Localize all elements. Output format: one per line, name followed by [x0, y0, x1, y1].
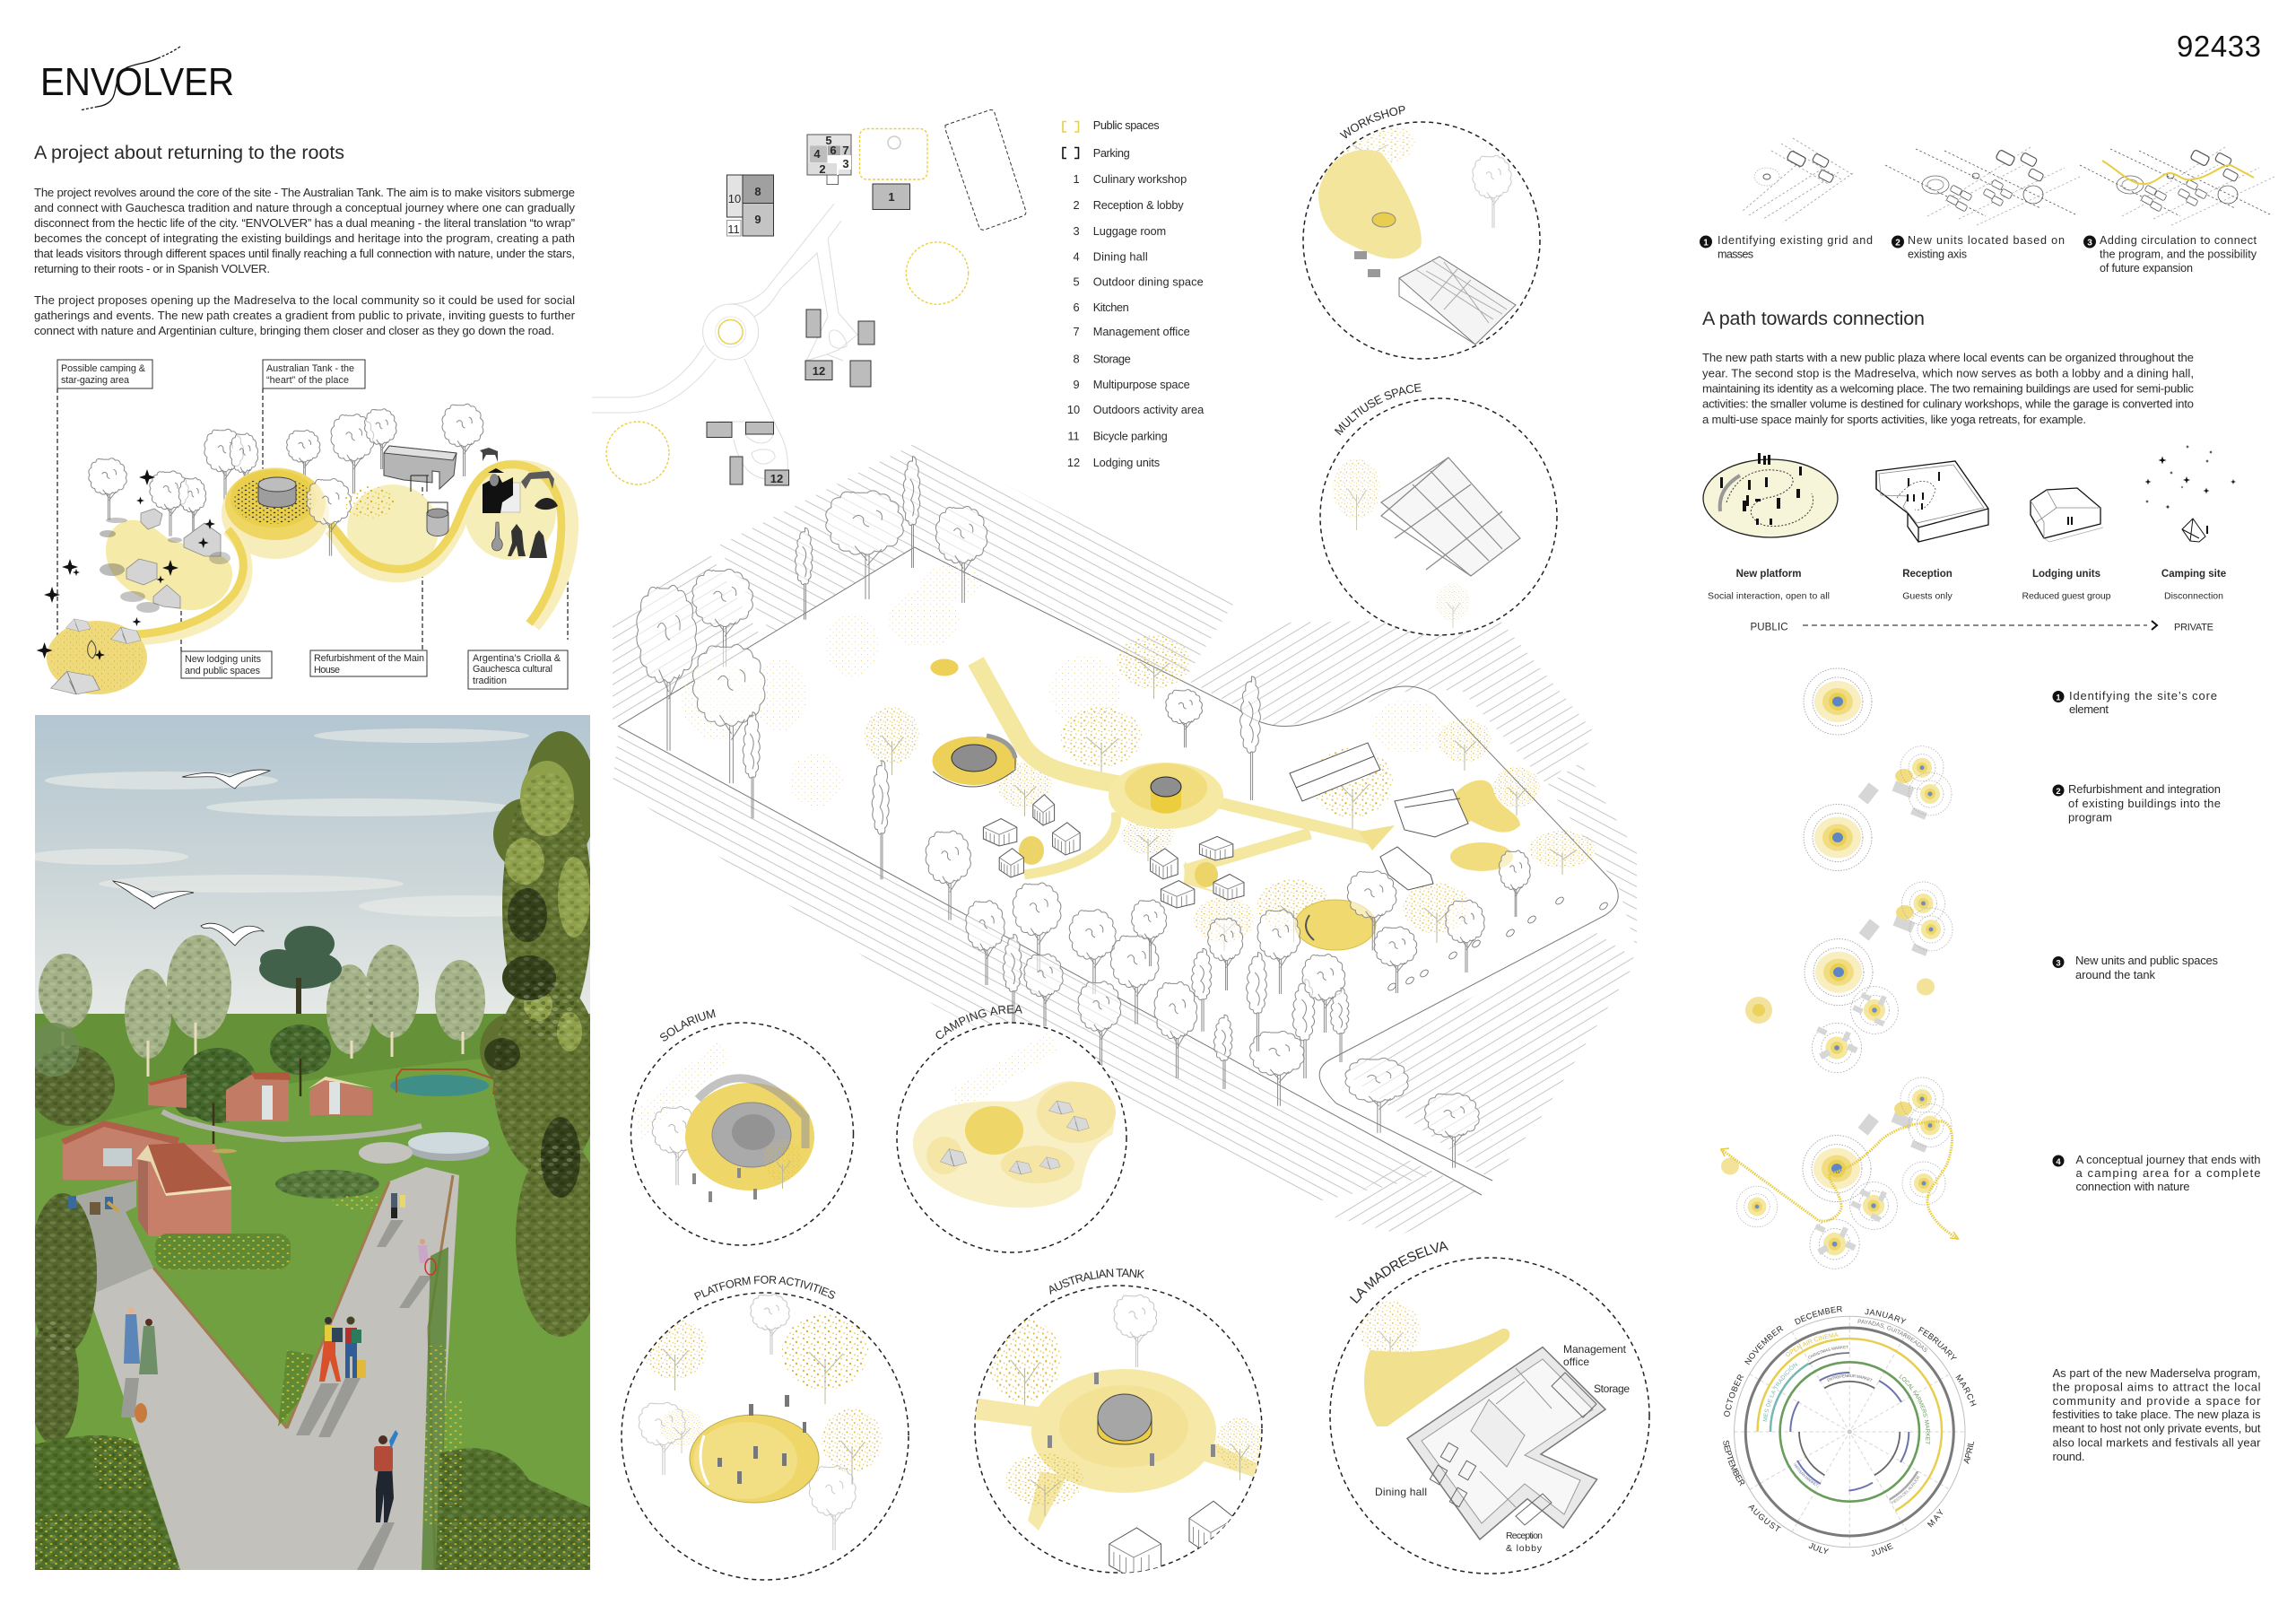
- legend: Parking: [1093, 146, 1130, 160]
- caption 1: masses: [1718, 248, 1753, 260]
- month labels: FEBRUARY: [1918, 1326, 1957, 1360]
- month labels: [1723, 1306, 1977, 1557]
- gradient labels: New platform: [1736, 569, 1801, 580]
- event labels: [1763, 1319, 1930, 1504]
- roundabout: [703, 304, 759, 360]
- parking outline: [945, 109, 1026, 230]
- label texts: “heart” of the place: [266, 375, 349, 386]
- step captions: [1700, 234, 2257, 275]
- caption 3: 3: [2087, 239, 2092, 248]
- legend: 1: [1073, 172, 1080, 186]
- text block: intro: gatherings and events. The new path creates a gradient from public to private, inviting guests to further: [34, 309, 576, 322]
- label texts: Gauchesca cultural: [473, 664, 552, 675]
- plan labels: & lobby: [1506, 1543, 1543, 1554]
- caption 2: existing axis: [1908, 248, 1967, 260]
- platform: [1295, 900, 1376, 950]
- legend: Management office: [1093, 325, 1190, 338]
- legend: Culinary workshop: [1093, 172, 1187, 186]
- stars: [37, 469, 215, 660]
- front pale tree: [307, 478, 351, 556]
- text block: events program: community and provide a space for: [2052, 1394, 2261, 1408]
- existing buildings: [1290, 743, 1468, 890]
- arrow: public to private: PUBLIC: [1751, 623, 1788, 633]
- legend swatches: [1063, 122, 1078, 158]
- far buildings: [148, 1072, 373, 1121]
- caption 1: [1700, 234, 1873, 260]
- mid field: [35, 1050, 590, 1570]
- text block: intro: disconnect from the hectic life of the city. “ENVOLVER” has a dual meaning - the literal translation “to wrap”: [34, 216, 575, 230]
- pool and circular tank: [390, 1069, 495, 1161]
- caption: step 4: connection with nature: [2075, 1180, 2190, 1193]
- label texts: tradition: [473, 676, 507, 686]
- label texts: star-gazing area: [61, 375, 129, 386]
- legend: Outdoors activity area: [1093, 403, 1205, 416]
- text block: intro: connect with nature and Argentinian culture, bringing them closer and closer as they go down the road.: [34, 324, 554, 337]
- gradient labels: Guests only: [1902, 590, 1952, 601]
- caption 3: the program, and the possibility: [2100, 248, 2257, 260]
- yellow blobs: [106, 520, 232, 610]
- caption 3: of future expansion: [2100, 262, 2193, 275]
- caption: step 3: around the tank: [2075, 968, 2156, 981]
- trees: [89, 404, 483, 536]
- legend: 3: [1073, 224, 1080, 238]
- event labels: ARTISAN MARKET: [1794, 1464, 1819, 1486]
- event labels: ENTREPENEUR MARKET: [1827, 1374, 1873, 1382]
- panel: australian tank: [974, 1269, 1263, 1574]
- caption 2: 2: [1895, 239, 1900, 248]
- month labels: MAY: [1926, 1509, 1943, 1527]
- label texts: Australian Tank - the: [266, 363, 354, 374]
- title: [664, 1016, 719, 1042]
- logo: ENVOLVER: [40, 46, 234, 109]
- plan labels: office: [1563, 1356, 1589, 1368]
- step 3 diagram: [2080, 147, 2274, 225]
- illustration: perspective render: [27, 715, 605, 1570]
- caption: step 3: [2052, 954, 2219, 981]
- site plan: 8: [754, 185, 761, 198]
- month spokes: [1735, 1316, 1965, 1548]
- month labels: OCTOBER: [1724, 1374, 1744, 1417]
- site plan: 3: [842, 157, 849, 170]
- cars: [1387, 895, 1609, 992]
- caption: step 2: [2052, 782, 2221, 824]
- far trees: [39, 926, 485, 1077]
- panel: la madreselva: [1329, 1242, 1650, 1574]
- panel: workshop: WORKSHOP: [1340, 106, 1405, 138]
- text block: intro: and connect with Gauchesca tradition and nature through a conceptual journey where one can gradually: [34, 201, 575, 214]
- flower beds: [155, 1234, 291, 1269]
- site plan: 10: [728, 192, 741, 205]
- arrow: public to private: PRIVATE: [2174, 623, 2213, 633]
- month labels: SEPTEMBER: [1723, 1441, 1745, 1486]
- label texts: House: [314, 665, 340, 676]
- multiuse building: [1381, 458, 1520, 576]
- label texts: Argentina’s Criolla &: [473, 653, 561, 664]
- hatching: [613, 440, 1637, 1234]
- panel: camping area: [896, 1005, 1127, 1253]
- panel: multiuse space: MULTIUSE SPACE: [1335, 383, 1422, 436]
- label texts: Refurbishment of the Main: [314, 653, 424, 664]
- icon: new platform: [1703, 453, 1838, 537]
- diagram: step 3 new units: [1745, 882, 1952, 1073]
- site plan: 11: [727, 222, 740, 236]
- far path: [162, 1112, 422, 1139]
- caption: step 2: program: [2068, 811, 2112, 824]
- arrow: public to private: [1751, 621, 2213, 633]
- caption: step 4: a camping area for a complete: [2075, 1166, 2260, 1180]
- month labels: APRIL: [1964, 1442, 1974, 1464]
- icon: camping stars and tent: [2145, 445, 2236, 542]
- leader lines: [57, 388, 568, 651]
- event arcs: [1758, 1339, 1942, 1511]
- month labels: NOVEMBER: [1744, 1326, 1783, 1365]
- solarium: [933, 736, 1017, 787]
- label boxes: [57, 360, 568, 689]
- text block: intro: The project proposes opening up the Madreselva to the local community so it could be used for social: [34, 293, 575, 307]
- chart: yearly events wheel: [1723, 1306, 1977, 1557]
- site plan: [592, 109, 1026, 485]
- label texts: New lodging units: [185, 654, 262, 665]
- site plan: 12: [770, 472, 783, 485]
- month labels: MARCH: [1955, 1374, 1977, 1407]
- legend: 5: [1073, 275, 1080, 289]
- diagram: step 2 refurbishment: [1804, 746, 1952, 870]
- event labels: CHRISTMAS MARKET: [1808, 1346, 1848, 1358]
- plan labels: Dining hall: [1375, 1486, 1427, 1498]
- text block: intro: [34, 186, 576, 337]
- gradient labels: Social interaction, open to all: [1708, 590, 1830, 601]
- legend: 9: [1073, 378, 1080, 391]
- shadows on road: [121, 1220, 432, 1570]
- icon: well: [427, 502, 448, 536]
- text block: path description: year. The second stop is the Madreselva, which now serves as both a lobby and a dining hall,: [1702, 366, 2194, 380]
- legend: [1063, 118, 1205, 469]
- site plan: 6: [830, 144, 837, 157]
- legend: Dining hall: [1093, 249, 1148, 264]
- legend: 7: [1073, 325, 1080, 338]
- diagram: step 4 conceptual journey: [1721, 1077, 1959, 1269]
- legend: 4: [1073, 249, 1080, 264]
- text block: events program: round.: [2052, 1450, 2084, 1463]
- workshop building: [1399, 257, 1516, 344]
- text block: events program: meant to host not only private events, but: [2052, 1421, 2261, 1435]
- birds: [113, 770, 270, 946]
- icon: water tank: [258, 477, 296, 508]
- month labels: JANUARY: [1865, 1308, 1907, 1324]
- step 2 diagram: [1885, 147, 2080, 225]
- caption 3: Adding circulation to connect: [2100, 234, 2257, 247]
- month labels: AUGUST: [1748, 1505, 1781, 1531]
- yellow path network: [976, 661, 1520, 899]
- plan labels: [1375, 1343, 1630, 1554]
- plan labels: Management: [1563, 1343, 1627, 1356]
- legend: 6: [1073, 301, 1080, 314]
- month labels: JULY: [1808, 1543, 1830, 1554]
- panel: platform for activities: PLATFORM FOR ACTIVITIES: [694, 1276, 836, 1301]
- diagram: step 1 site core: [1804, 668, 1872, 735]
- pale vegetation: [682, 565, 1444, 807]
- icons: gaucho culture: [480, 448, 558, 558]
- lodging units: [983, 795, 1244, 908]
- caption: step 4: [2052, 1153, 2260, 1193]
- site plan: 4: [813, 147, 821, 161]
- diagram steps: grid, axis, circulation: [1742, 138, 2274, 225]
- text block: path description: a multi-use space mainly for sports activities, like yoga retreats, for example.: [1702, 413, 2086, 426]
- title: [1356, 1249, 1455, 1304]
- foreground houses: [61, 1121, 231, 1236]
- panel: camping area: CAMPING AREA: [936, 1005, 1022, 1039]
- panel: solarium: SOLARIUM: [660, 1009, 716, 1041]
- site boundary: [619, 547, 1618, 1195]
- journey arrow: [1721, 1121, 1958, 1239]
- program blocks: [707, 175, 909, 485]
- caption: step 3: New units and public spaces: [2075, 954, 2219, 967]
- month labels: JUNE: [1871, 1543, 1893, 1557]
- gradient labels: Disconnection: [2164, 590, 2223, 601]
- roads: [592, 204, 857, 479]
- heading: returning to the roots: A project about returning to the roots: [34, 142, 344, 163]
- outlined trees: [637, 457, 1530, 1168]
- site plan: 5: [825, 134, 832, 147]
- event labels: FIESTA DEL ALFAJOR: [1891, 1476, 1919, 1504]
- small plaza: [930, 658, 959, 676]
- field shrubs: [275, 1170, 386, 1209]
- panel: australian tank: AUSTRALIAN TANK: [1049, 1269, 1144, 1295]
- step 1 diagram: [1742, 138, 1853, 222]
- legend: Reception & lobby: [1093, 198, 1184, 212]
- diagram: concept journey ribbon: [37, 360, 572, 694]
- gradient labels: Reception: [1902, 569, 1952, 580]
- caption: step 2: Refurbishment and integration: [2068, 782, 2221, 796]
- yellow trees: [865, 635, 1596, 951]
- label texts: Possible camping &: [61, 363, 146, 374]
- icon: reception volume: [1876, 461, 1988, 542]
- legend: Public spaces: [1093, 118, 1160, 132]
- text block: path description: The new path starts with a new public plaza where local events can be organized throughout the: [1702, 351, 2194, 364]
- event labels: MES DE LA TRADICIÓN: [1763, 1362, 1797, 1421]
- text block: events program: also local markets and festivals all year: [2052, 1435, 2261, 1450]
- title: [939, 1013, 1027, 1041]
- panel: la madreselva: LA MADRESELVA: [1350, 1242, 1449, 1304]
- project number: 92433: [2177, 30, 2261, 63]
- caption: step 1: Identifying the site’s core: [2069, 689, 2217, 702]
- site plan: 2: [819, 162, 826, 176]
- caption: step 1: 1: [2056, 693, 2061, 703]
- caption: step 3: 3: [2056, 958, 2061, 969]
- title: [1340, 391, 1424, 436]
- caption 2: New units located based on: [1908, 234, 2065, 247]
- label texts: [61, 363, 561, 686]
- legend: Outdoor dining space: [1093, 275, 1204, 289]
- site plan: 9: [754, 213, 761, 226]
- text block: events program: festivities to take place. The new plaza is: [2052, 1408, 2261, 1421]
- legend: Lodging units: [1093, 456, 1160, 469]
- caption: step 4: A conceptual journey that ends with: [2075, 1153, 2260, 1166]
- panel: platform for activities: [621, 1276, 909, 1581]
- title: [1344, 113, 1412, 140]
- legend: 10: [1067, 403, 1080, 416]
- site plan: 1: [888, 190, 895, 204]
- legend: 12: [1067, 456, 1080, 469]
- people: [68, 1148, 436, 1522]
- site plan: 12: [813, 364, 825, 378]
- text block: path description: maintaining its identity as a welcoming place. The two remaining buildings are used for semi-public: [1702, 382, 2194, 395]
- tents and campfire: [51, 619, 141, 694]
- label texts: and public spaces: [185, 666, 261, 676]
- legend: 8: [1073, 352, 1080, 366]
- text block: intro: that leads visitors through different spaces until finally reaching a full connection with nature, under the stars,: [34, 247, 575, 260]
- month labels: DECEMBER: [1794, 1306, 1842, 1325]
- big trees and shrubs: [29, 731, 605, 1570]
- caption: step 4: 4: [2056, 1157, 2061, 1167]
- lodging units: [126, 509, 221, 608]
- legend: Storage: [1093, 352, 1131, 366]
- camping blob: [47, 621, 147, 694]
- legend: Kitchen: [1093, 301, 1129, 314]
- text block: events program: the proposal aims to attract the local: [2052, 1380, 2261, 1394]
- text block: intro: The project revolves around the core of the site - The Australian Tank. The aim is to make visitors submerge: [34, 186, 575, 199]
- text block: path description: activities: the smaller volume is destined for culinary workshops, while the garage is converted into: [1702, 397, 2194, 411]
- floor plan: [1407, 1347, 1605, 1539]
- bushes: [100, 518, 230, 613]
- text block: intro: becomes the concept of integrating the existing buildings and heritage into the program, creating a path: [34, 231, 575, 245]
- caption: step 2: 2: [2056, 787, 2061, 797]
- caption 1: 1: [1703, 239, 1709, 248]
- event labels: OPEN AIR CINEMA: [1786, 1333, 1839, 1356]
- legend: 2: [1073, 198, 1080, 212]
- legend: Multipurpose space: [1093, 378, 1190, 391]
- legend: Luggage room: [1093, 224, 1166, 238]
- event labels: PAYADAS, GUITARREADAS: [1858, 1319, 1927, 1352]
- legend: 11: [1067, 429, 1080, 443]
- legend: Bicycle parking: [1093, 429, 1168, 443]
- text block: events program: [2052, 1366, 2261, 1463]
- icon: lodging volume: [2031, 488, 2103, 542]
- title: [697, 1284, 839, 1303]
- panel: multiuse space: [1319, 383, 1558, 636]
- text block: path description: [1702, 351, 2194, 426]
- caption: step 1: element: [2069, 702, 2109, 716]
- caption 3: [2083, 234, 2257, 275]
- logo: ENVOLVER: ENVOLVER: [40, 60, 234, 104]
- panel: solarium: [630, 1009, 854, 1246]
- plan labels: Reception: [1506, 1530, 1543, 1541]
- text block: events program: As part of the new Maderselva program,: [2052, 1366, 2260, 1380]
- plan labels: Storage: [1594, 1382, 1630, 1395]
- caption 1: Identifying existing grid and: [1718, 234, 1873, 247]
- caption: step 1: [2052, 689, 2217, 716]
- sky: [35, 715, 590, 1016]
- text block: intro: returning to their roots - or in Spanish VOLVER.: [34, 262, 270, 275]
- roads: [76, 1181, 153, 1292]
- gradient labels: Reduced guest group: [2022, 590, 2111, 601]
- gradient labels: Camping site: [2161, 569, 2226, 580]
- site plan: 7: [842, 144, 849, 157]
- main building 1-7: [807, 135, 851, 185]
- gradient labels: [1708, 569, 2226, 601]
- event labels: LOCAL FARMERS’ MARKET: [1900, 1374, 1930, 1444]
- public space outlines: [606, 129, 969, 484]
- heading: a path towards connection: A path towards connection: [1702, 308, 1925, 329]
- panel: workshop: [1302, 106, 1541, 360]
- ground: [35, 1014, 590, 1139]
- caption 2: [1892, 234, 2065, 260]
- caption: step 2: of existing buildings into the: [2068, 797, 2221, 810]
- title: [1050, 1277, 1148, 1295]
- gradient labels: Lodging units: [2032, 569, 2100, 580]
- icon: main house: [384, 446, 457, 492]
- isometric site axonometric: [613, 440, 1637, 1234]
